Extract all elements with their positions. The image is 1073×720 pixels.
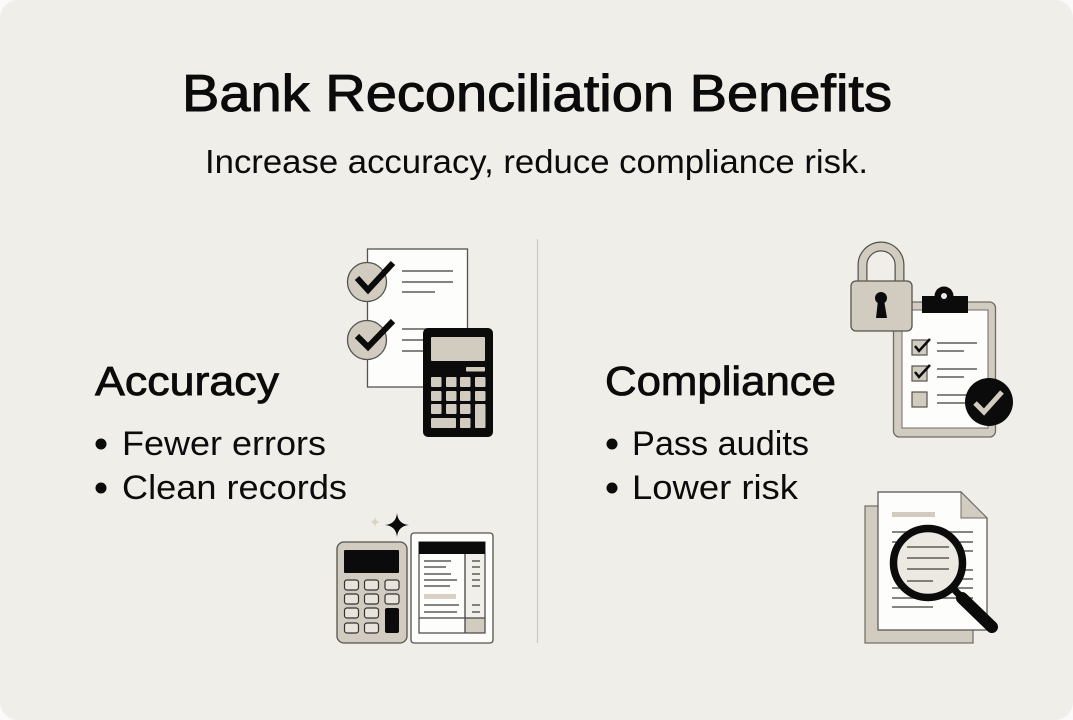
icon: calculator and ledger sheet [337, 513, 493, 643]
bullet: fewer errors: Fewer errors [122, 425, 326, 463]
heading: accuracy: Accuracy [95, 358, 280, 404]
bullet: pass audits: Pass audits [632, 425, 809, 463]
panel: compliance text [605, 358, 836, 507]
bullet: lower risk: Lower risk [632, 469, 799, 507]
heading: compliance: Compliance [605, 358, 836, 404]
subtitle: Increase accuracy, reduce compliance risk. [205, 143, 868, 180]
bullet: clean records: Clean records [122, 469, 347, 507]
panel: accuracy text [95, 358, 347, 507]
icon: checklist document with calculator [348, 249, 493, 437]
icon: clipboard with padlock [851, 246, 1013, 437]
icon: document under magnifying glass [865, 492, 992, 643]
title: Bank Reconciliation Benefits [182, 65, 892, 123]
